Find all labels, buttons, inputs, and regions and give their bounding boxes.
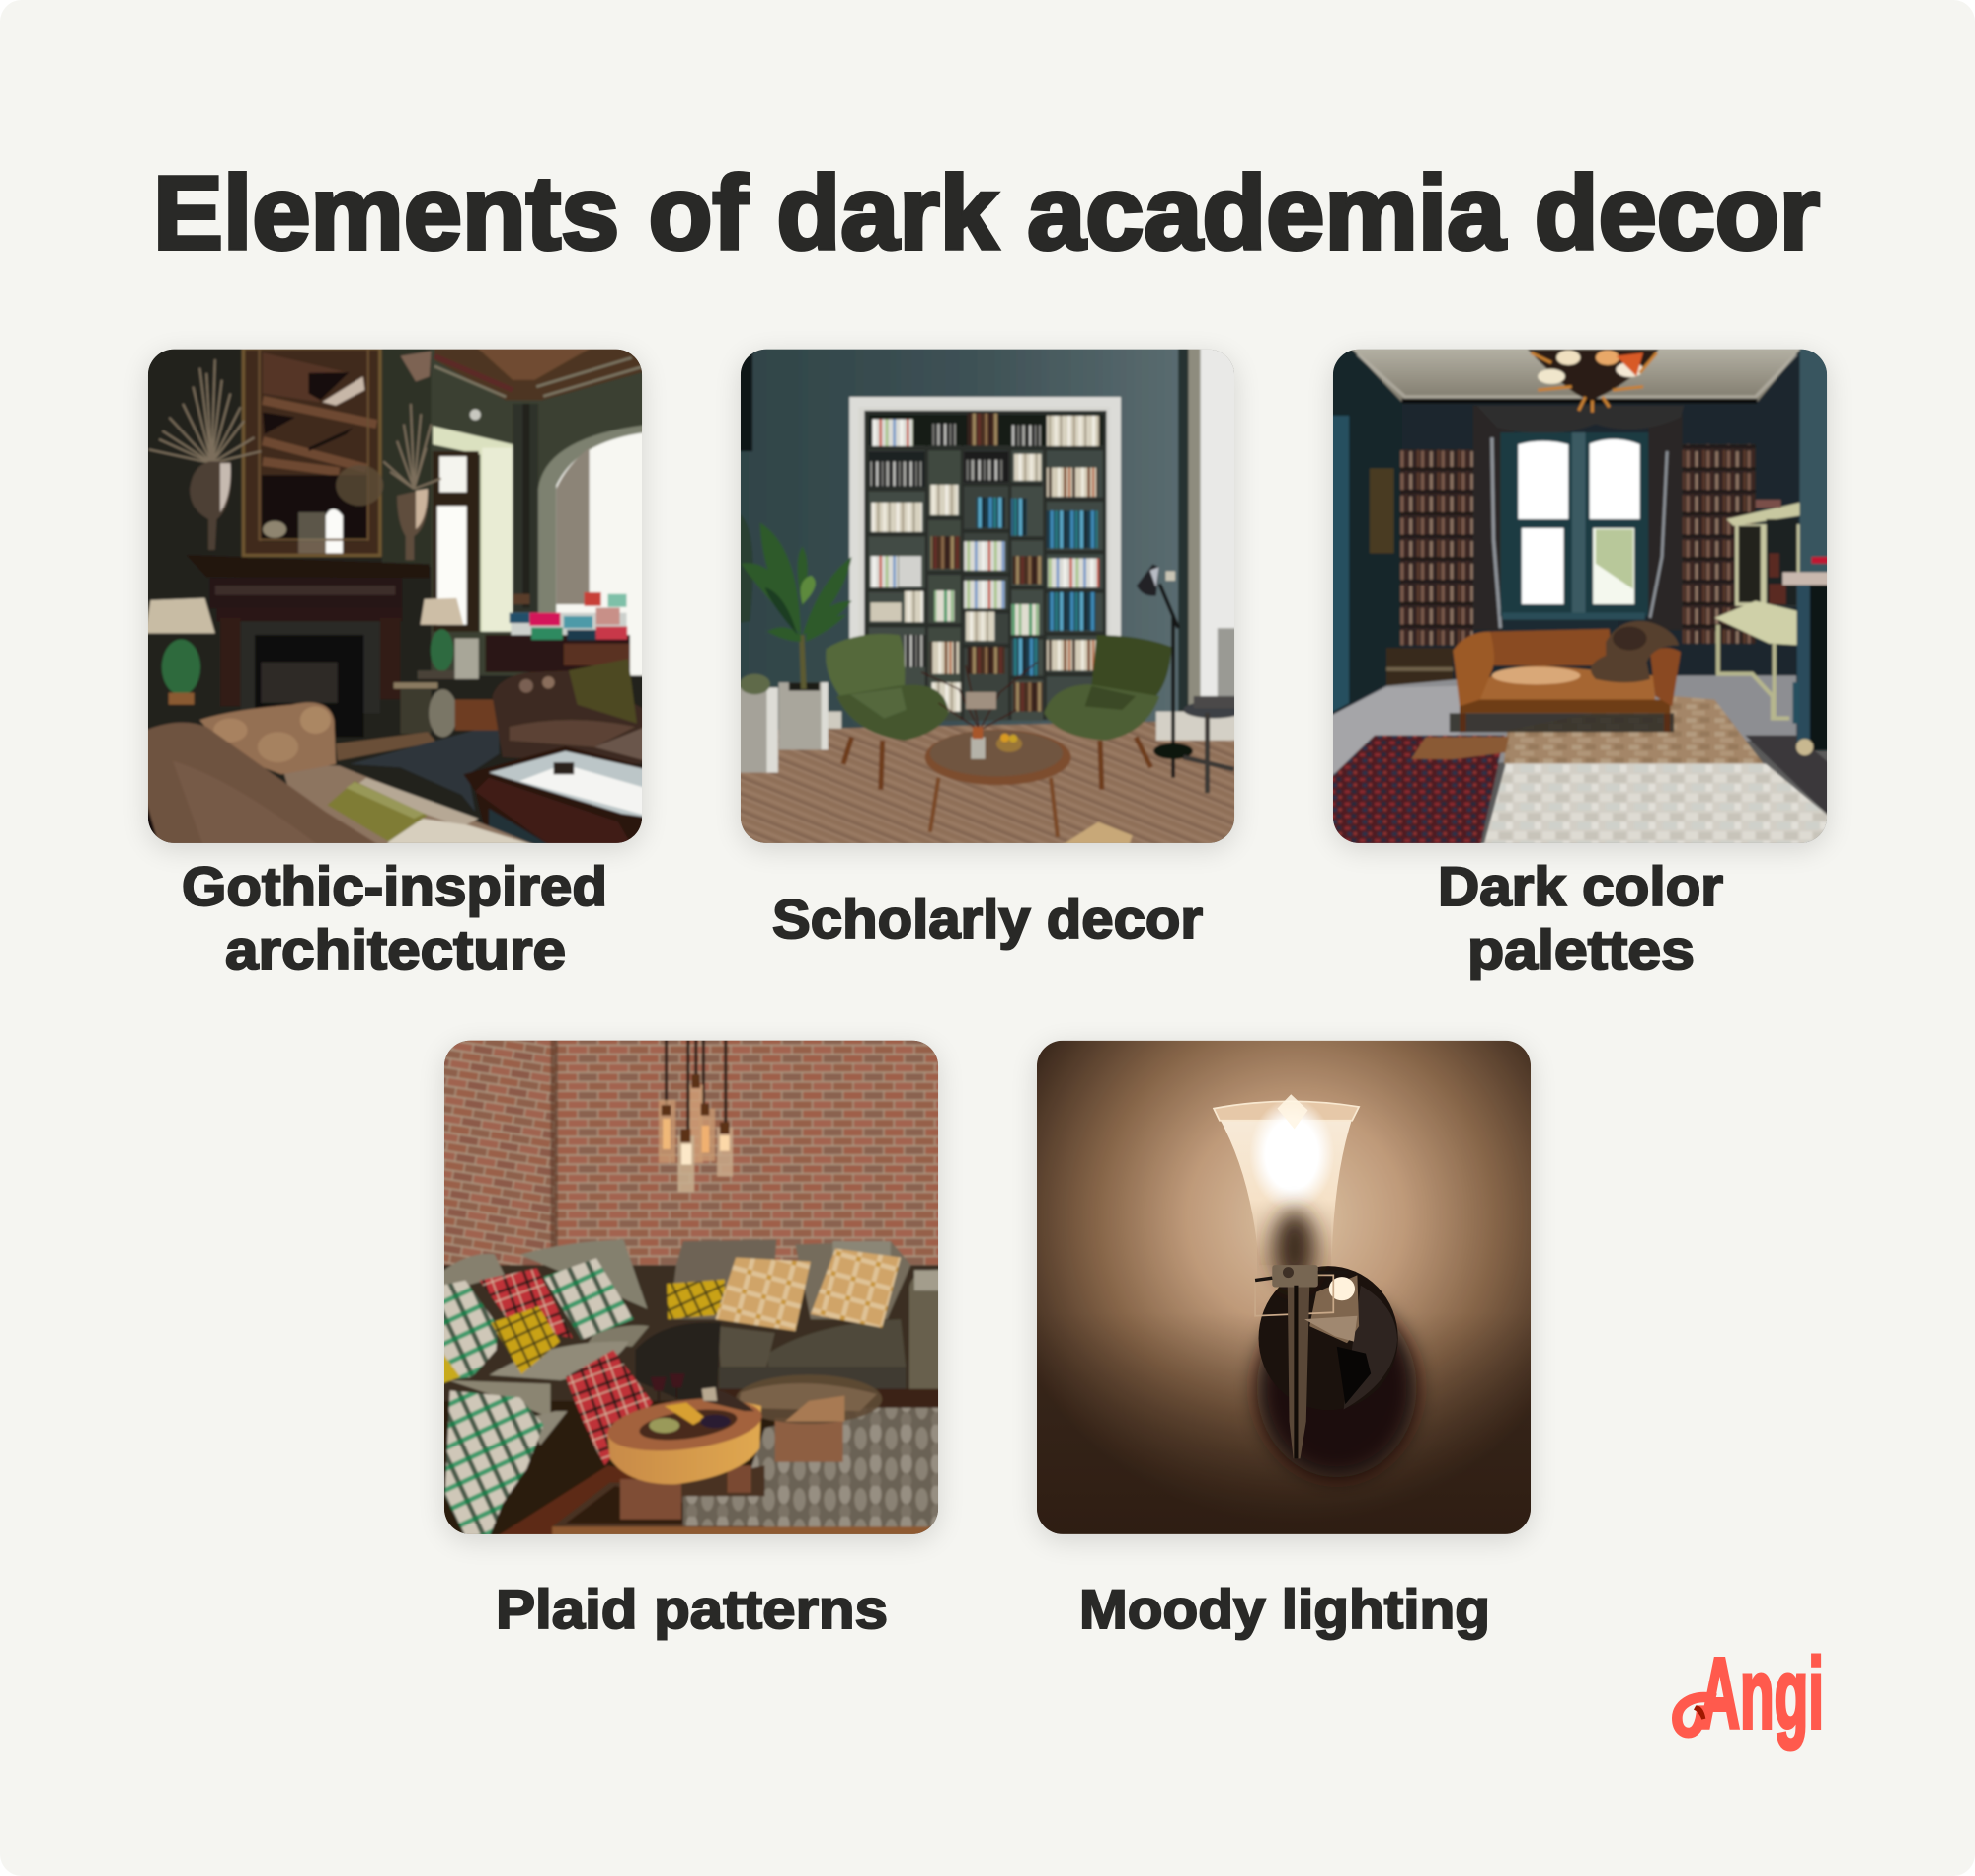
label: Dark color palettes — [1438, 855, 1723, 980]
label: Scholarly decor: Scholarly decor — [772, 888, 1203, 950]
photo shadow — [148, 355, 642, 849]
panel: Moody lighting — [1037, 1041, 1531, 1640]
label: Dark color palettes: Dark color — [1438, 855, 1723, 917]
panel: Scholarly decor — [738, 346, 1244, 950]
label: Plaid patterns: Plaid patterns — [496, 1578, 888, 1640]
label: Gothic-inspired architecture: architecture — [225, 918, 566, 980]
photo: dark teal room with leather sofa — [1330, 346, 1830, 846]
panel: Plaid patterns — [441, 1037, 941, 1640]
photo shadow — [1333, 355, 1827, 849]
title: Elements of dark academia decor — [153, 155, 1820, 272]
photo: wall sconce — [1037, 1041, 1531, 1534]
logo: Angi — [1677, 1639, 1824, 1750]
label: Gothic-inspired architecture — [182, 855, 607, 980]
label: Moody lighting: Moody lighting — [1079, 1578, 1490, 1640]
label: Gothic-inspired architecture: Gothic-inspired — [182, 855, 607, 917]
logo loop — [1677, 1697, 1715, 1733]
photo shadow — [741, 355, 1234, 849]
photo: library with bookshelf and green chairs — [738, 346, 1244, 846]
panel: Gothic-inspired architecture — [145, 346, 645, 980]
logo: Angi: Angi — [1699, 1639, 1824, 1750]
photo: brick wall living room with plaid pillows — [441, 1037, 941, 1537]
label: Dark color palettes: palettes — [1467, 918, 1695, 980]
photo: gothic living room — [145, 346, 645, 846]
photo shadow — [444, 1047, 938, 1540]
panel: Dark color palettes — [1330, 346, 1830, 980]
photo shadow — [1037, 1047, 1531, 1540]
